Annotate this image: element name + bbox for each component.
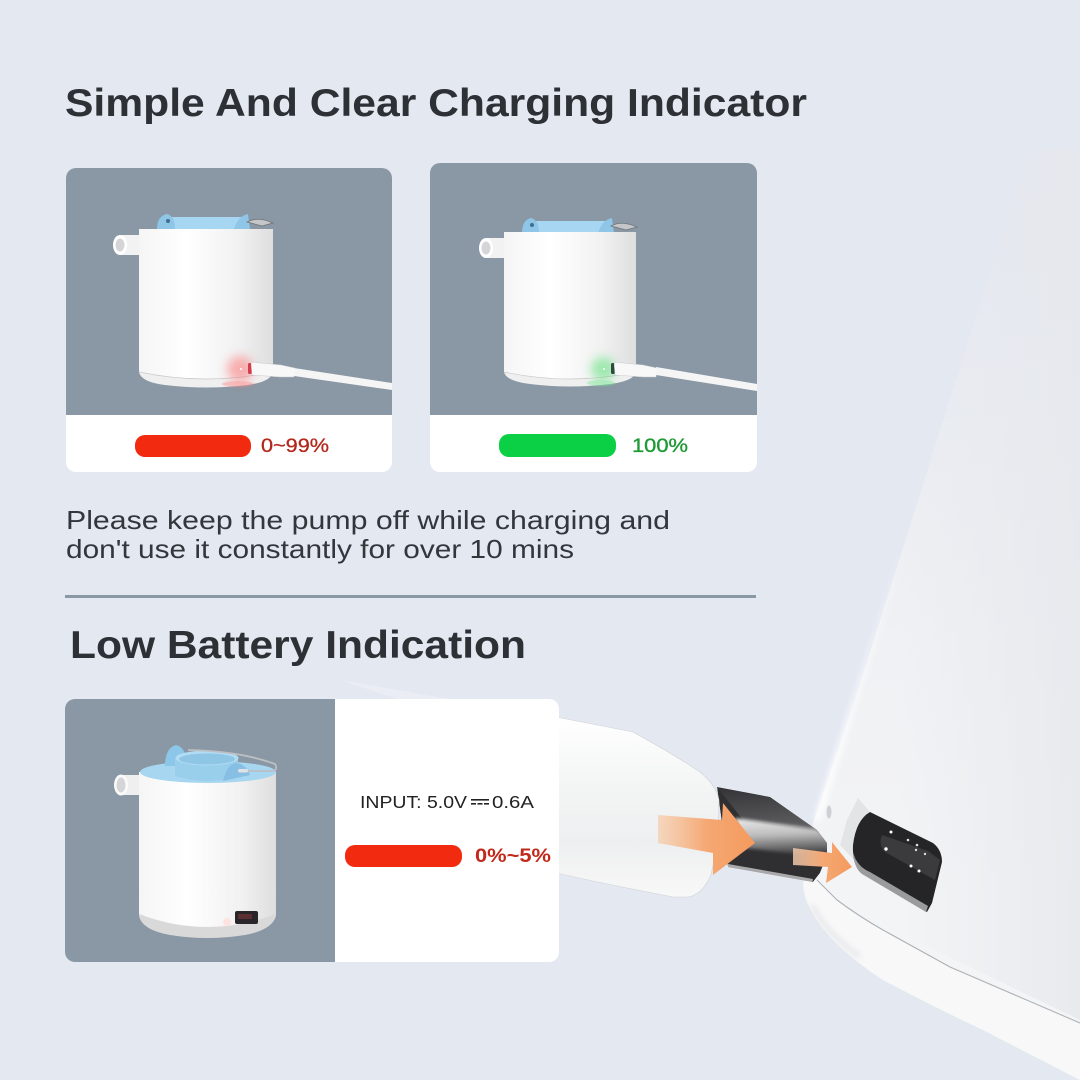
metal connector [717,787,832,884]
input rating: 0.6A [492,792,534,812]
panel card [65,699,559,962]
pump base rim [803,880,1080,1080]
panel photo background [66,168,392,415]
input rating [360,792,534,812]
percentage label: 0%~5% [475,846,551,867]
charging note [66,505,670,564]
faint plug extension [340,680,560,730]
input rating: INPUT: 5.0V [360,792,467,812]
panel card [66,168,392,472]
heading: low battery: Low Battery Indication [70,624,526,667]
charging note: Please keep the pump off while charging and [66,505,670,535]
panel card [430,163,757,472]
panel photo background [65,699,335,962]
panel: fully charged green [430,163,757,472]
USB cable plug [340,680,832,897]
pump: charging green [479,218,757,391]
plug housing [556,717,719,897]
pump: charging red [113,214,392,390]
pump: low battery [114,745,276,938]
red bar [345,845,462,867]
panel: low battery [65,699,559,962]
arrow: small orange [793,842,852,883]
percentage label: 0~99% [261,436,329,457]
title: Simple And Clear Charging Indicator [65,82,807,125]
charging port [840,798,942,912]
panel photo background [430,163,757,415]
charging note: don't use it constantly for over 10 mins [66,534,574,564]
large pump close-up [803,150,1080,1080]
green bar [499,434,616,457]
panel: charging red [66,168,392,472]
percentage label: 100% [632,436,688,457]
red bar [135,435,251,457]
pump body [803,150,1080,1080]
arrow: large orange [658,803,755,875]
indicator hole [826,806,832,818]
